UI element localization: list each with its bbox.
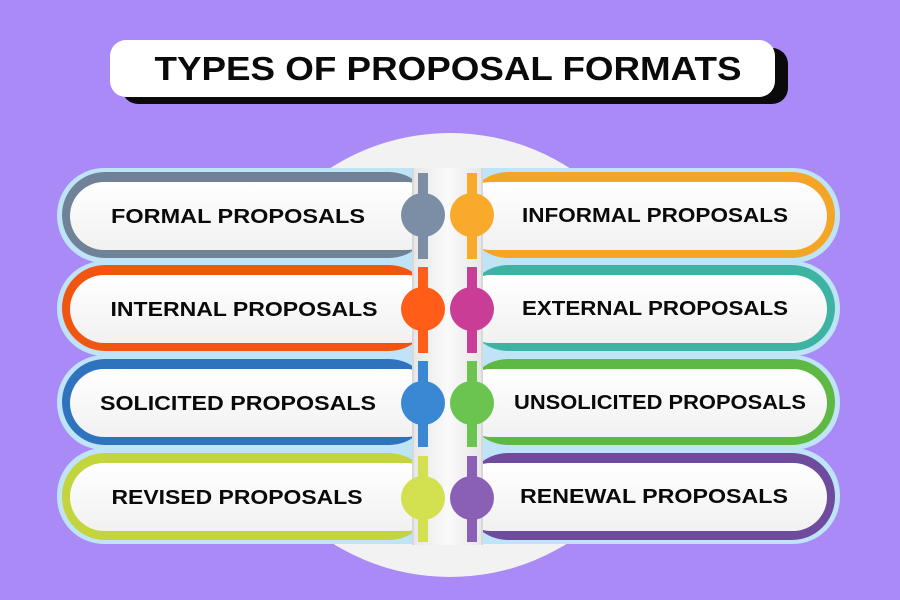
connectors row 1: [401, 173, 494, 259]
connectors row 4: [401, 456, 494, 542]
pill: revised proposals: REVISED PROPOSALS: [112, 487, 362, 509]
pill: external proposals: EXTERNAL PROPOSALS: [522, 298, 788, 320]
pill: internal proposals: [62, 265, 440, 351]
pill: formal proposals: [62, 172, 440, 258]
title: [110, 40, 788, 104]
center strip: [412, 168, 483, 545]
pill: renewal proposals: RENEWAL PROPOSALS: [520, 486, 788, 508]
connectors row 2: [401, 267, 494, 353]
background circle: [228, 133, 672, 577]
pill: renewal proposals: [457, 453, 835, 540]
pill: solicited proposals: SOLICITED PROPOSALS: [100, 393, 376, 415]
pill: informal proposals: INFORMAL PROPOSALS: [522, 205, 788, 227]
title: TYPES OF PROPOSAL FORMATS: [154, 50, 742, 87]
pill: formal proposals: FORMAL PROPOSALS: [111, 206, 365, 228]
pill: informal proposals: [457, 172, 835, 258]
pill: external proposals: [457, 265, 835, 351]
connectors row 3: [401, 361, 494, 447]
pill: unsolicited proposals: [457, 359, 835, 445]
pill: internal proposals: INTERNAL PROPOSALS: [110, 299, 378, 321]
pill: unsolicited proposals: UNSOLICITED PROPOSALS: [514, 392, 806, 414]
pill: revised proposals: [62, 453, 440, 540]
pill: solicited proposals: [62, 359, 440, 445]
row backgrounds (light blue outlines): [57, 168, 840, 544]
